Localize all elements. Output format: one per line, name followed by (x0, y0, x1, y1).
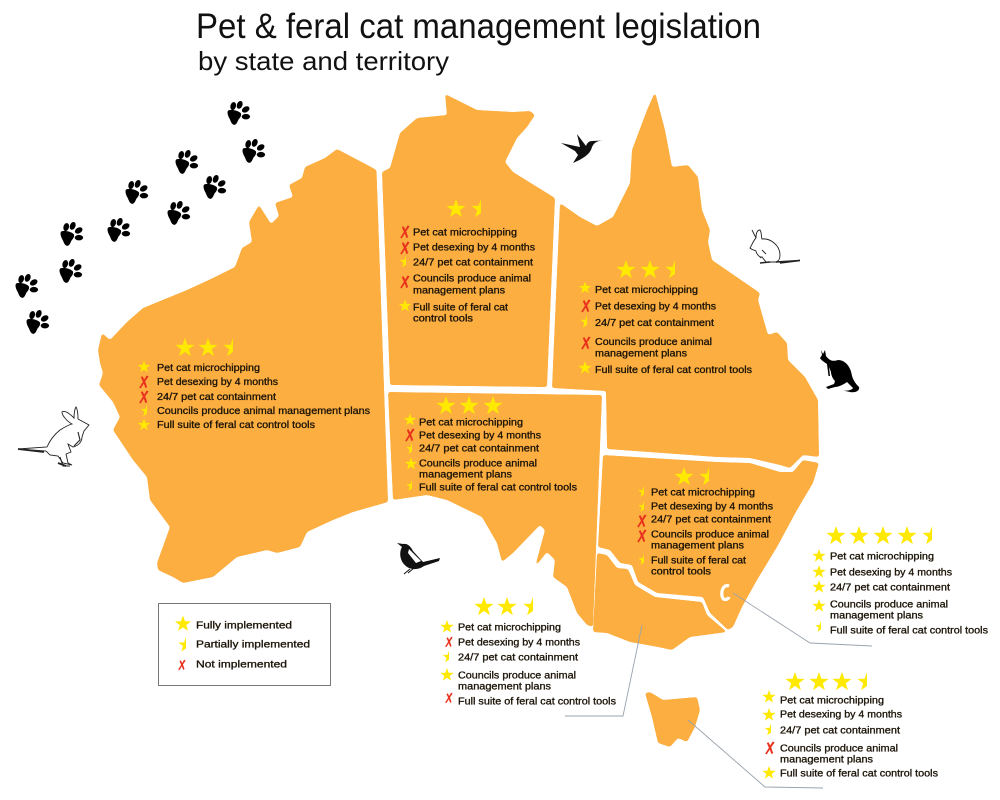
rating stars (474, 597, 533, 615)
status icons (762, 690, 776, 779)
requirement list: management plans (595, 348, 687, 360)
panel: New South Wales (637, 467, 773, 578)
rating stars (785, 672, 867, 690)
requirement list: management plans (651, 540, 744, 552)
status icons (138, 360, 150, 430)
rating stars (175, 338, 233, 356)
requirement list (419, 418, 577, 494)
requirement list: management plans (780, 754, 873, 766)
requirement list: Pet desexing by 4 months (419, 430, 541, 442)
requirement list: management plans (458, 682, 551, 692)
requirement list: Councils produce animal management plans (157, 406, 370, 417)
requirement list: Full suite of feral cat control tools (830, 626, 988, 636)
requirement list: Councils produce animal (458, 670, 576, 682)
legend: partially implemented (178, 637, 310, 651)
requirement list: Full suite of feral cat control tools (157, 420, 315, 431)
requirement list: Councils produce animal (651, 530, 769, 540)
leader lines (565, 593, 872, 788)
requirement list: Pet desexing by 4 months (157, 377, 278, 388)
requirement list: management plans (830, 610, 923, 622)
panel: Northern Territory (399, 199, 535, 324)
requirement list: Councils produce animal (830, 600, 948, 610)
requirement list (458, 622, 616, 708)
requirement list (413, 228, 535, 324)
requirement list: Pet cat microchipping (595, 285, 698, 296)
map of Australia (98, 92, 819, 747)
requirement list: Full suite of feral cat control tools (595, 365, 752, 376)
requirement list: Pet desexing by 4 months (413, 242, 535, 254)
requirement list (651, 488, 773, 578)
rating stars (674, 467, 709, 485)
requirement list (830, 552, 988, 636)
rating stars (446, 199, 481, 217)
requirement list: Pet desexing by 4 months (830, 568, 952, 578)
status icons (812, 549, 826, 632)
requirement list: Full suite of feral cat (413, 302, 508, 314)
icon: bilby (750, 230, 800, 263)
status icons (440, 620, 454, 703)
requirement list (157, 363, 370, 431)
requirement list: Pet cat microchipping (780, 696, 884, 706)
panel: South Australia (404, 396, 577, 494)
state: South Australia (388, 392, 602, 627)
legend: not implemented (178, 660, 287, 670)
requirement list: Councils produce animal (780, 744, 898, 754)
requirement list: 24/7 pet cat containment (419, 444, 539, 454)
requirement list (595, 285, 752, 376)
title: Pet & feral cat management legislation (196, 7, 761, 46)
legend: fully implemented: Fully implemented (196, 620, 292, 632)
state: Northern Territory (382, 94, 555, 387)
requirement list: management plans (419, 470, 512, 480)
requirement list: control tools (413, 314, 473, 324)
requirement list: Pet cat microchipping (830, 552, 934, 562)
requirement list: Pet desexing by 4 months (780, 710, 902, 720)
icon: kangaroo (820, 350, 859, 392)
state: Western Australia (98, 149, 388, 583)
panel: Queensland (578, 260, 752, 376)
icon: jerboa (18, 407, 89, 466)
icon: magpie (397, 543, 440, 574)
paw prints (16, 100, 266, 334)
state: New South Wales (598, 455, 819, 630)
panel: Victoria (440, 597, 616, 708)
requirement list: Pet cat microchipping (419, 418, 523, 428)
panel: Tasmania (762, 672, 938, 780)
rating stars (616, 260, 675, 278)
requirement list: Councils produce animal (419, 458, 537, 470)
requirement list: Pet desexing by 4 months (595, 302, 716, 312)
requirement list: Pet cat microchipping (413, 228, 517, 238)
requirement list (780, 696, 938, 780)
requirement list: Full suite of feral cat control tools (780, 768, 938, 780)
requirement list: 24/7 pet cat containment (413, 258, 533, 268)
requirement list: 24/7 pet cat containment (157, 392, 276, 403)
requirement list: 24/7 pet cat containment (651, 514, 771, 526)
requirement list: Councils produce animal (595, 337, 712, 348)
requirement list: Pet cat microchipping (157, 363, 260, 374)
status icons (637, 486, 647, 565)
requirement list: Pet cat microchipping (651, 488, 755, 498)
legend: fully implemented (175, 616, 292, 632)
subtitle: by state and territory (198, 46, 449, 76)
requirement list: 24/7 pet cat containment (780, 726, 900, 736)
status icons (404, 414, 417, 491)
rating stars (826, 526, 932, 544)
legend (158, 604, 330, 686)
status icons (578, 282, 592, 374)
requirement list: Pet cat microchipping (458, 622, 561, 634)
state: Queensland (552, 92, 819, 468)
requirement list: Pet desexing by 4 months (651, 502, 773, 512)
state: Victoria (593, 553, 727, 650)
requirement list: 24/7 pet cat containment (595, 318, 714, 329)
requirement list: Full suite of feral cat control tools (419, 482, 577, 494)
legend: not implemented: Not implemented (196, 660, 287, 670)
legend: partially implemented: Partially implemented (196, 640, 310, 650)
requirement list: 24/7 pet cat containment (458, 652, 578, 664)
ACT ring (722, 586, 729, 600)
panel: Australian Capital Territory (812, 526, 988, 636)
status icons (399, 226, 411, 311)
requirement list: Councils produce animal (413, 274, 531, 284)
requirement list: control tools (651, 566, 711, 578)
icon: hummingbird (561, 134, 603, 163)
requirement list: Pet desexing by 4 months (458, 638, 580, 648)
state: Tasmania (645, 692, 700, 747)
requirement list: 24/7 pet cat containment (830, 582, 950, 594)
requirement list: Full suite of feral cat control tools (458, 696, 616, 708)
panel: Western Australia (138, 338, 370, 431)
requirement list: management plans (413, 286, 505, 296)
rating stars (436, 396, 503, 414)
requirement list: Full suite of feral cat (651, 556, 746, 566)
